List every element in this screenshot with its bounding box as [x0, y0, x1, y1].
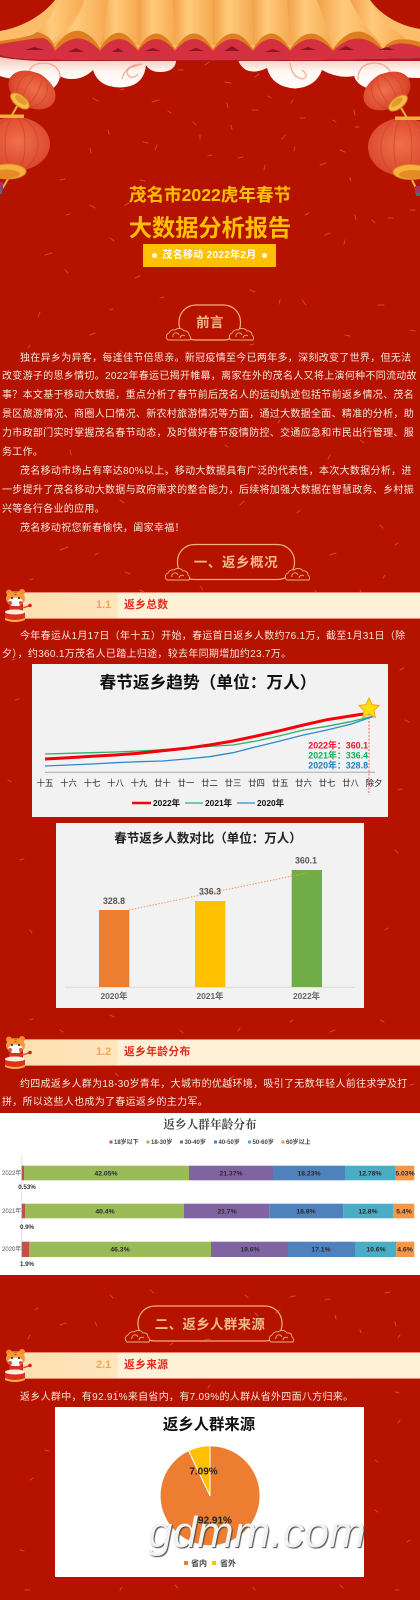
- subheader 1.1: [23, 592, 420, 619]
- x axis labels: 十八: [107, 778, 124, 788]
- text block: 1.2: 拼，所以这些人也成为了春运返乡的主力军。: [2, 1097, 208, 1108]
- bar value labels: 40.4%: [95, 1208, 115, 1216]
- value labels: 360.1: [295, 856, 317, 866]
- text block: foreword: 茂名移动市场占有率达80%以上，移动大数据具有广泛的代表性，本次大数据分析，进: [20, 466, 412, 477]
- date badge: 茂名移动 2022年2月: [162, 250, 257, 261]
- bar value labels: 18.8%: [296, 1208, 316, 1216]
- value labels: 336.3: [199, 886, 221, 896]
- series 2022: [45, 712, 374, 759]
- year labels: [100, 991, 321, 1001]
- small share labels: 0.9%: [20, 1224, 35, 1231]
- legend: [184, 1558, 236, 1568]
- x axis labels: 廿一: [178, 778, 195, 788]
- bar value labels: 5.4%: [396, 1208, 412, 1216]
- bar value labels: 19.6%: [240, 1246, 260, 1254]
- subheader 2.1: [23, 1352, 420, 1379]
- chart title: 春节返乡趋势（单位：万人）: [100, 672, 316, 692]
- value labels: 328.8: [103, 896, 125, 906]
- x axis labels: [37, 778, 382, 788]
- line chart: trend: [32, 664, 388, 817]
- value labels: [308, 740, 368, 770]
- text block: 1.2: 约四成返乡人群为18-30岁青年，大城市的优越环境，吸引了无数年轻人前往求学及打: [20, 1078, 408, 1090]
- icon: star: [359, 698, 379, 718]
- subheader 2.1: 返乡来源: [124, 1359, 168, 1371]
- x axis labels: 廿六: [295, 778, 312, 788]
- pie chart: origin: [55, 1407, 364, 1577]
- x axis labels: 十七: [84, 778, 100, 788]
- x axis labels: 廿二: [201, 778, 218, 788]
- bar value labels: 42.05%: [94, 1170, 118, 1178]
- x axis labels: 廿三: [225, 778, 241, 788]
- bar value labels: 18.23%: [297, 1170, 321, 1178]
- legend: 60岁以上: [286, 1138, 311, 1146]
- text block: foreword: 景区旅游情况、商圈人口情况、新农村旅游情况等方面，通过大数据全面、精准的分析，助: [2, 409, 414, 420]
- small share labels: [18, 1184, 36, 1268]
- heading: 二、返乡人群来源: 二、返乡人群来源: [155, 1317, 265, 1332]
- small share labels: 0.53%: [18, 1184, 36, 1191]
- date badge: [143, 244, 276, 267]
- icon: lanterns right: [364, 72, 420, 196]
- legend: 省内: [191, 1558, 207, 1568]
- pie slices: [160, 1446, 260, 1546]
- legend: 2020年: [257, 798, 285, 808]
- title: [129, 185, 291, 241]
- bar value labels: 46.3%: [110, 1246, 130, 1254]
- legend: 40-50岁: [218, 1138, 240, 1146]
- subheader 1.1: 1.1: [96, 599, 111, 611]
- icon: tiger with drum 2.1: [5, 1349, 32, 1382]
- legend: 18-30岁: [151, 1138, 172, 1146]
- subheader 2.1: 2.1: [96, 1359, 111, 1371]
- bars 2022: [22, 1166, 414, 1180]
- heading: 二、返乡人群来源: [124, 1305, 294, 1342]
- clouds: right: [238, 58, 420, 88]
- chart title: 返乡人群年龄分布: [163, 1118, 257, 1132]
- bar value labels: 10.6%: [366, 1246, 386, 1254]
- text block: foreword: 一步提升了茂名移动大数据与政府需求的整合能力，后续将加强大数据在智慧政务、乡村振: [2, 485, 414, 496]
- bar value labels: 17.1%: [311, 1246, 331, 1254]
- bar value labels: 4.6%: [397, 1246, 413, 1254]
- bar chart: comparison: [56, 823, 364, 1008]
- year labels: 2020年: [100, 991, 128, 1001]
- text block: foreword: 独在异乡为异客，每逢佳节倍思亲。新冠疫情至今已两年多，深刻改变了世界，但无法: [20, 352, 411, 364]
- legend: 18岁以下: [114, 1138, 139, 1146]
- legend: 50-60岁: [252, 1138, 274, 1146]
- series 2020: [45, 716, 374, 766]
- text block: 2.1: 返乡人群中，有92.91%来自省内，有7.09%的人群从省外四面八方归来。: [20, 1392, 353, 1402]
- bar value labels: [94, 1170, 415, 1254]
- year labels: 2022年: [2, 1169, 21, 1177]
- text block: foreword: 改变游子的思乡情切。2022年春运已揭开帷幕，离家在外的茂名人又将上演何种不同流动故: [2, 371, 417, 382]
- x axis labels: 除夕: [366, 778, 382, 788]
- heading: 一、返乡概况: 一、返乡概况: [194, 555, 278, 570]
- year labels: [2, 1169, 21, 1253]
- text block: 1.2: [2, 1078, 408, 1108]
- value labels: 2022年：360.1: [308, 740, 368, 750]
- slice labels: 92.91%: [198, 1516, 232, 1526]
- subheader 1.2: [23, 1039, 420, 1066]
- x axis labels: 十九: [131, 778, 148, 788]
- subheader 1.1: 返乡总数: [124, 599, 168, 611]
- bars 2020: [22, 1242, 414, 1257]
- x axis labels: 廿十: [154, 778, 171, 788]
- text block: 1.1: 今年春运从1月17日（年十五）开始，春运首日返乡人数约76.1万，截至1月31日（除: [20, 630, 405, 642]
- chart title: 春节返乡人数对比（单位：万人）: [114, 830, 302, 846]
- text block: foreword: [2, 352, 417, 534]
- legend: 省外: [220, 1558, 236, 1568]
- year labels: 2020年: [2, 1245, 21, 1253]
- legend: [132, 798, 285, 808]
- roof with scalloped eaves: [0, 0, 420, 61]
- subheader 1.2: 1.2: [96, 1046, 111, 1058]
- watermark: gdmm.com: [148, 1508, 366, 1557]
- legend: 2021年: [205, 798, 233, 808]
- icon: tiger with drum 1.1: [5, 589, 32, 622]
- slice labels: 7.09%: [189, 1466, 218, 1478]
- icon: tiger with drum 1.2: [5, 1036, 32, 1069]
- heading: 前言: [166, 304, 254, 341]
- small share labels: 1.9%: [20, 1261, 35, 1268]
- legend: 2022年: [153, 798, 181, 808]
- bar value labels: 21.37%: [219, 1170, 243, 1178]
- heading: 前言: 前言: [196, 315, 224, 330]
- value labels: 2021年：336.4: [308, 750, 368, 760]
- text block: foreword: 事？本文基于移动大数据，重点分析了春节前后茂名人的运动轨迹包括节前返乡情况、茂名: [2, 390, 414, 401]
- subheader 1.2: 返乡年龄分布: [124, 1046, 191, 1058]
- icon: lanterns left: [0, 70, 56, 194]
- legend: 30-40岁: [184, 1138, 206, 1146]
- year labels: 2021年: [196, 991, 224, 1001]
- legend: [110, 1138, 311, 1146]
- text block: foreword: 力市政部门实时掌握茂名春节动态，及时做好春节疫情防控、交通应急和市民出行管理、服: [2, 428, 414, 439]
- text block: foreword: 茂名移动祝您新春愉快，阖家幸福！: [20, 523, 185, 534]
- title: 茂名市2022虎年春节: [129, 185, 291, 205]
- bars 2021: [22, 1204, 414, 1218]
- bar value labels: 12.78%: [358, 1170, 382, 1178]
- text block: foreword: 兴等各行各业的应用。: [2, 504, 105, 515]
- slice labels: [189, 1466, 232, 1526]
- text block: 1.1: 夕），约360.1万茂名人已踏上归途，较去年同期增加约23.7万。: [2, 649, 291, 660]
- x axis labels: 廿五: [272, 778, 288, 788]
- heading: 一、返乡概况: [164, 544, 310, 580]
- x axis labels: 廿七: [319, 778, 335, 788]
- chart title: 返乡人群来源: [163, 1414, 256, 1434]
- bars: [99, 870, 322, 987]
- series 2021: [45, 716, 374, 754]
- bar value labels: 21.7%: [217, 1208, 237, 1216]
- x axis labels: 十五: [37, 778, 53, 788]
- clouds: left: [0, 56, 176, 88]
- bar value labels: 5.03%: [395, 1170, 415, 1178]
- text block: foreword: 务工作。: [2, 447, 43, 458]
- x axis labels: 十六: [60, 778, 77, 788]
- value labels: 2020年：328.8: [308, 760, 368, 770]
- text block: 1.1: [2, 630, 405, 660]
- x axis labels: 廿八: [342, 778, 359, 788]
- bar value labels: 12.8%: [358, 1208, 378, 1216]
- value labels: [103, 856, 317, 906]
- year labels: 2022年: [293, 991, 321, 1001]
- x axis labels: 廿四: [248, 778, 265, 788]
- year labels: 2021年: [2, 1207, 21, 1215]
- title: 大数据分析报告: [129, 215, 291, 241]
- stacked bar chart: age distribution: [0, 1113, 420, 1275]
